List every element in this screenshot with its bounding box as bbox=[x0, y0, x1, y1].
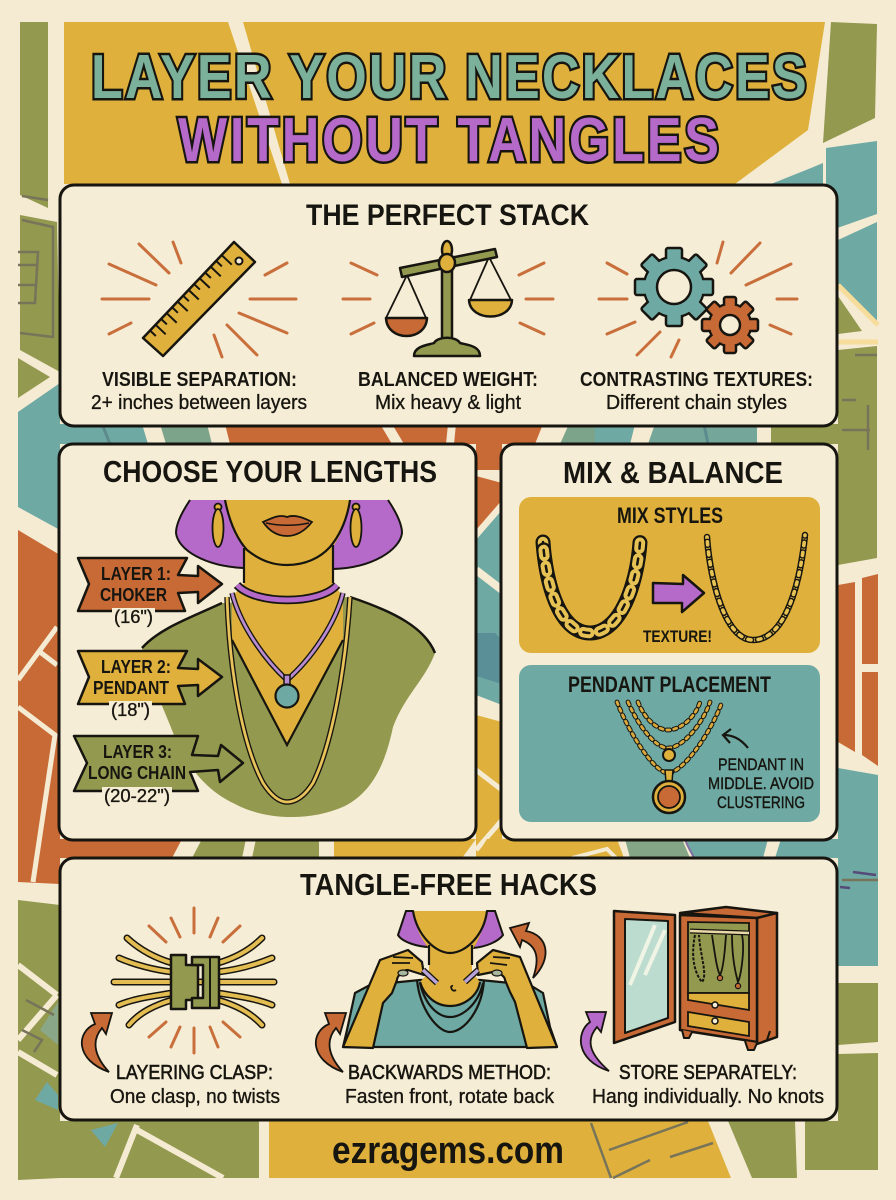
caption: store separately: STORE SEPARATELY: bbox=[619, 1062, 797, 1084]
sub-panel: mix styles: MIX STYLES bbox=[617, 503, 723, 528]
banner: layer 1: CHOKER bbox=[100, 584, 167, 605]
heading: CHOOSE YOUR LENGTHS bbox=[103, 454, 437, 489]
caption: contrasting textures: Different chain styles bbox=[606, 392, 787, 414]
left arm and hand bbox=[343, 950, 424, 1048]
illustration: woman with layered necklaces bbox=[142, 500, 435, 817]
heading: THE PERFECT STACK bbox=[306, 199, 589, 232]
sub-panel: pendant placement: PENDANT PLACEMENT bbox=[568, 672, 771, 697]
caption: contrasting textures: CONTRASTING TEXTURES: bbox=[580, 369, 813, 391]
caption: balanced weight: Mix heavy & light bbox=[375, 392, 521, 414]
banner: layer 2 bbox=[78, 651, 222, 720]
clasp ends bbox=[423, 970, 478, 991]
caption: visible separation: VISIBLE SEPARATION: bbox=[102, 369, 297, 391]
banner: layer 2: PENDANT bbox=[93, 677, 170, 698]
title bbox=[91, 43, 807, 175]
icon: ruler bbox=[102, 242, 296, 357]
icon: gears bbox=[599, 242, 797, 357]
banner: layer 3: LAYER 3: bbox=[103, 741, 172, 762]
caption: balanced weight bbox=[358, 369, 538, 414]
icon: chunky chain bbox=[543, 542, 640, 633]
caption: backwards method bbox=[345, 1062, 555, 1108]
arrow: small curved bbox=[723, 729, 748, 748]
caption: layering clasp bbox=[110, 1062, 280, 1108]
icon: rope chain bbox=[707, 535, 805, 640]
strip between top and middle panels bbox=[60, 424, 838, 444]
note bbox=[708, 755, 814, 812]
sub-panel: mix styles bbox=[519, 497, 820, 653]
caption: backwards method: BACKWARDS METHOD: bbox=[348, 1062, 551, 1084]
caption: visible separation: 2+ inches between layers bbox=[91, 392, 307, 414]
footer url: ezragems.com bbox=[332, 1130, 564, 1172]
caption: layering clasp: One clasp, no twists bbox=[110, 1086, 280, 1108]
sub-panel: mix styles: TEXTURE! bbox=[643, 627, 712, 646]
arrow: store separately bbox=[581, 1012, 609, 1071]
caption: layering clasp: LAYERING CLASP: bbox=[116, 1062, 273, 1084]
note: CLUSTERING bbox=[717, 793, 805, 812]
gap between middle panels bbox=[476, 440, 502, 858]
icon: jewellery armoire bbox=[614, 907, 777, 1050]
banner: layer 3 bbox=[74, 736, 243, 806]
strip between middle and bottom panels bbox=[60, 839, 838, 858]
lips bbox=[263, 516, 312, 536]
icon: backwards method bbox=[343, 911, 557, 1048]
caption: store separately bbox=[592, 1062, 824, 1108]
banner: layer 1 bbox=[78, 558, 222, 627]
banner: layer 2: (18") bbox=[111, 699, 150, 720]
icon: balance scale bbox=[343, 241, 553, 356]
banner: layer 3: (20-22") bbox=[104, 785, 170, 806]
title: LAYER YOUR NECKLACES bbox=[91, 43, 807, 112]
shirt bbox=[343, 980, 557, 1047]
banner: layer 1: LAYER 1: bbox=[101, 563, 171, 584]
panel: mix and balance bbox=[501, 444, 837, 840]
banner: layer 3: LONG CHAIN bbox=[88, 762, 186, 783]
neckline necklaces bbox=[417, 980, 484, 1032]
note: MIDDLE. AVOID bbox=[708, 774, 814, 793]
banner: layer 1: (16") bbox=[114, 606, 153, 627]
pendant chain bbox=[232, 593, 343, 708]
sub-panel: pendant placement bbox=[519, 665, 820, 822]
panel: tangle-free hacks bbox=[60, 858, 837, 1120]
earrings bbox=[212, 504, 362, 547]
right arm and hand bbox=[477, 950, 557, 1048]
caption: balanced weight: BALANCED WEIGHT: bbox=[358, 369, 538, 391]
caption: visible separation bbox=[91, 369, 307, 414]
heading: MIX & BALANCE bbox=[563, 455, 783, 490]
hair bbox=[398, 911, 503, 948]
arrow: backwards method upper bbox=[510, 923, 546, 978]
panel: the perfect stack bbox=[60, 185, 837, 426]
banner: layer 2: LAYER 2: bbox=[101, 656, 171, 677]
long chain bbox=[227, 597, 350, 802]
note: PENDANT IN bbox=[718, 755, 804, 774]
face and neck bbox=[413, 911, 487, 1006]
caption: store separately: Hang individually. No knots bbox=[592, 1086, 824, 1108]
icon: three layered necklaces bbox=[617, 702, 722, 813]
arrow: backwards method lower bbox=[316, 1013, 346, 1072]
panel: choose your lengths bbox=[59, 444, 476, 840]
heading: TANGLE-FREE HACKS bbox=[300, 867, 597, 902]
caption: contrasting textures bbox=[580, 369, 813, 414]
title: WITHOUT TANGLES bbox=[178, 106, 719, 175]
icon: layering clasp bbox=[114, 908, 274, 1053]
caption: backwards method: Fasten front, rotate back bbox=[345, 1086, 555, 1108]
arrow: clasp bbox=[82, 1013, 112, 1072]
choker bbox=[237, 585, 337, 600]
arrow: purple bbox=[653, 575, 704, 612]
